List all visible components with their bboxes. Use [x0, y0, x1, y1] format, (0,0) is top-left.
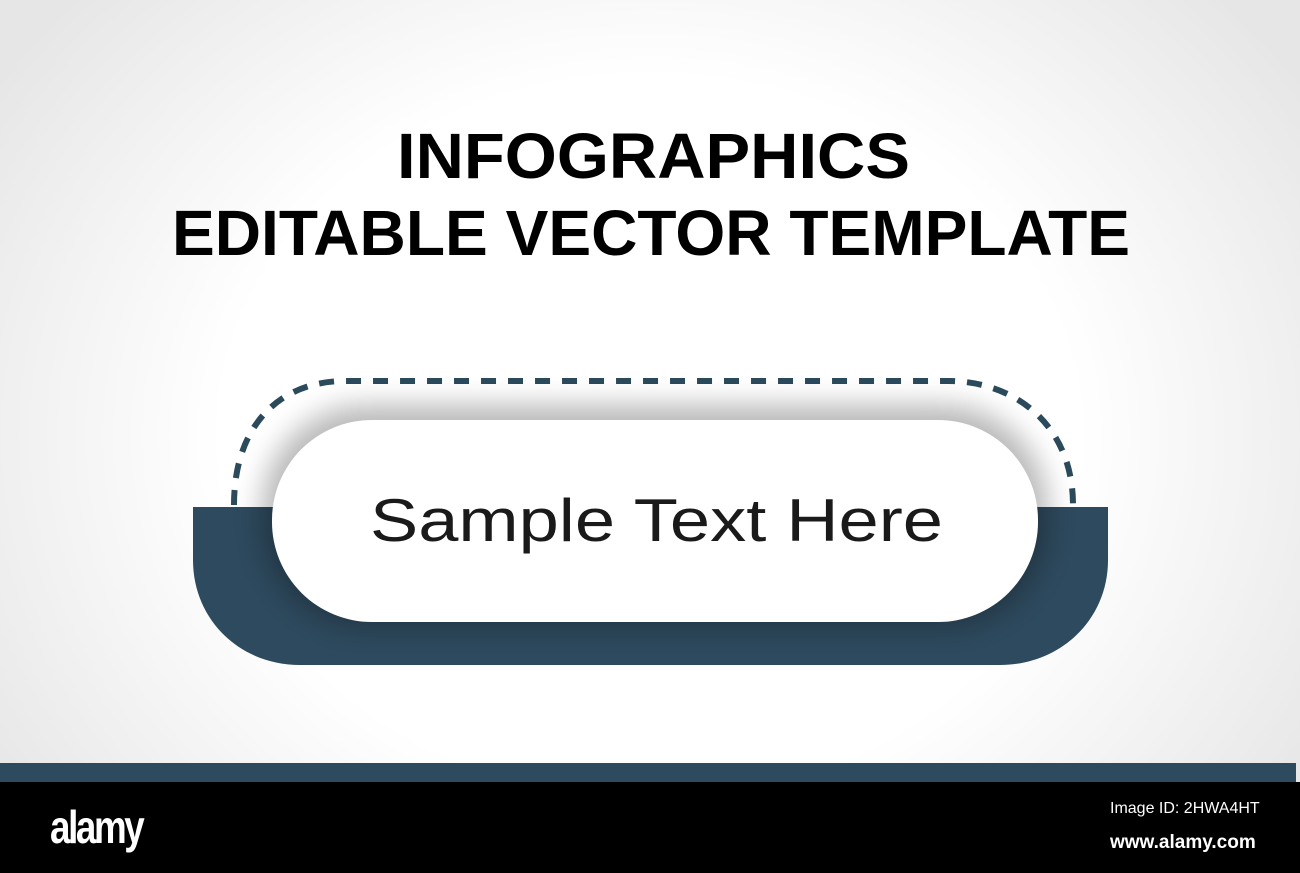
url: www.alamy.com [1110, 832, 1256, 853]
logo: alamy [50, 801, 142, 853]
dark blue base [193, 507, 1108, 665]
footer [0, 782, 1300, 873]
title: INFOGRAPHICS [397, 120, 910, 192]
title [172, 120, 1130, 266]
white pill [272, 420, 1038, 622]
pill shadow [262, 405, 1048, 627]
image id: Image ID: 2HWA4HT [1110, 800, 1260, 817]
bottom stripe [0, 763, 1296, 782]
sample text: Sample Text Here [370, 487, 943, 554]
dashed arc [234, 381, 1073, 505]
